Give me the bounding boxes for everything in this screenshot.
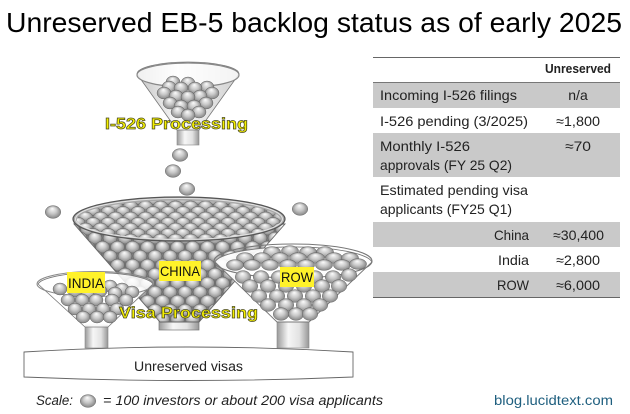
row: monthly approvals: approvals (FY 25 Q2) [380, 157, 512, 173]
funnel: China [73, 197, 285, 330]
row: I-526 pending: I-526 pending (3/2025) [380, 113, 528, 129]
row: incoming filings: n/a [568, 87, 588, 103]
row: India [498, 252, 600, 268]
row: estimated pending applicants [380, 182, 528, 217]
row: incoming filings [380, 87, 588, 103]
scale legend: = 100 investors or about 200 visa applicants [103, 393, 383, 408]
table header: Unreserved [545, 62, 611, 76]
table row shading [373, 58, 620, 298]
platform: unreserved visas: Unreserved visas [134, 359, 243, 374]
diagram: funnels [37, 62, 372, 348]
row: I-526 pending: ≈1,800 [556, 113, 600, 129]
source credit: blog.lucidtext.com [494, 393, 613, 408]
row: monthly approvals [380, 138, 591, 173]
label: I-526 Processing: I-526 Processing [105, 116, 248, 133]
label: INDIA: INDIA [68, 275, 105, 291]
table: backlog status [373, 58, 620, 298]
funnel: India [37, 272, 153, 348]
icon: scale ball [80, 395, 96, 407]
row: ROW [497, 277, 600, 293]
platform: unreserved visas [24, 347, 353, 380]
label: Visa Processing: Visa Processing [119, 305, 258, 322]
row: monthly approvals: ≈70 [565, 138, 591, 154]
funnel: ROW [214, 244, 372, 348]
row: monthly approvals: Monthly I-526 [380, 138, 470, 154]
label: ROW: ROW [281, 269, 314, 285]
label: CHINA: CHINA [160, 263, 201, 279]
row: China: China [494, 227, 529, 243]
row: ROW: ≈6,000 [556, 277, 600, 293]
row: China: ≈30,400 [553, 227, 604, 243]
row: China [494, 227, 604, 243]
row: estimated pending applicants: Estimated pending visa [380, 182, 528, 198]
row: ROW: ROW [497, 277, 530, 293]
falling balls [45, 149, 308, 218]
row: incoming filings: Incoming I-526 filings [380, 87, 517, 103]
row: India: India [498, 252, 529, 268]
row: I-526 pending [380, 113, 600, 129]
scale legend: Scale: [36, 393, 73, 408]
row: India: ≈2,800 [556, 252, 600, 268]
funnel: I-526 processing [137, 62, 239, 145]
title: Unreserved EB-5 backlog status as of early 2025 [6, 7, 622, 38]
row: estimated pending applicants: applicants (FY25 Q1) [380, 201, 512, 217]
